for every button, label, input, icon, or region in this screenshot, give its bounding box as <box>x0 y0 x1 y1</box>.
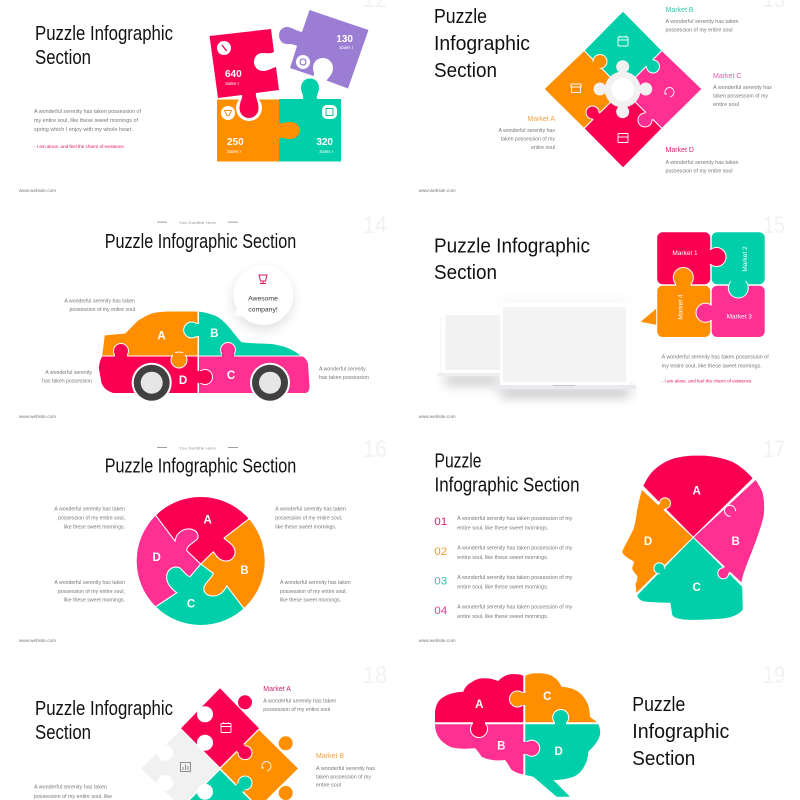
list item 04 <box>434 605 573 620</box>
text: upper right: A wonderful serenity has taken <box>275 507 346 513</box>
market C <box>713 73 772 108</box>
market B <box>316 753 375 789</box>
car piece C <box>198 356 310 394</box>
subtitle: You Subtitle Here <box>179 220 217 225</box>
list item 03 <box>434 575 573 591</box>
icon: headset <box>665 88 674 97</box>
market B: possession of my entire soul <box>666 28 732 34</box>
brain piece C <box>525 673 597 722</box>
market B <box>666 7 739 34</box>
text: upper left: like these sweet mornings. <box>64 525 125 531</box>
head piece A <box>643 455 753 537</box>
panel: slide 19 brain puzzle <box>435 662 785 797</box>
text block: spring which I enjoy with my whole heart. <box>34 127 133 133</box>
text: lower left <box>42 370 92 385</box>
list item 03: entire soul, like these sweet mornings. <box>457 585 548 591</box>
slide number 18: 18 <box>363 662 387 689</box>
text: lower left <box>54 580 125 604</box>
text: upper left: A wonderful serenity has taken <box>64 299 135 305</box>
head label B: B <box>732 536 740 548</box>
title: Section <box>632 748 695 770</box>
text: upper right: like these sweet mornings. <box>275 525 336 531</box>
callout: awesome company <box>233 265 293 330</box>
title: Section <box>35 47 91 69</box>
panel: slide 12 four sales puzzle <box>19 0 387 193</box>
text: upper left: A wonderful serenity has taken <box>54 507 125 513</box>
head piece C <box>637 537 743 620</box>
market D: possession of my entire soul <box>666 168 732 174</box>
head piece B <box>693 479 765 583</box>
list item 04: 04 <box>434 605 447 617</box>
head puzzle <box>622 455 765 620</box>
panel: slide 18 tilted puzzle <box>34 662 387 800</box>
text: lower left: A wonderful serenity has taken <box>54 580 125 586</box>
circle label B: B <box>240 565 249 577</box>
puzzle piece: teal 320 <box>279 78 341 162</box>
bite in teal <box>197 784 213 800</box>
panel: slide 14 car puzzle <box>19 212 387 419</box>
teal tab <box>236 776 252 792</box>
circle piece D <box>136 516 201 607</box>
market B: Market B <box>666 7 694 14</box>
puzzle piece: red 640: Sales I <box>225 81 239 86</box>
text: right <box>319 367 369 381</box>
text block: possession of my entire soul, like <box>34 794 112 800</box>
list item 04: entire soul, like these sweet mornings. <box>457 614 548 620</box>
text block <box>662 354 769 369</box>
tab: orange <box>658 498 670 511</box>
brain label A: A <box>475 699 483 711</box>
text: lower right: possession of my entire soul, <box>280 589 347 595</box>
puzzle piece market 3 <box>711 285 765 338</box>
diamond puzzle <box>544 11 702 168</box>
market B: taken possession of my <box>316 774 371 780</box>
market B: A wonderful serenity has taken <box>666 19 739 25</box>
puzzle piece: red 640 <box>210 29 279 118</box>
piece: grey <box>141 730 220 800</box>
puzzle piece market 1 <box>657 232 711 285</box>
puzzle piece: purple 130: Sales I <box>339 45 353 50</box>
puzzle piece market 2 <box>711 232 765 285</box>
market A: possession of my entire soul <box>263 707 330 713</box>
car label B: B <box>210 328 218 340</box>
text block: A wonderful serenity has taken <box>34 785 107 791</box>
panel: slide 16 circle puzzle <box>19 436 387 643</box>
market D <box>666 147 739 174</box>
market A: taken possession of my <box>501 136 555 142</box>
title: Section <box>434 60 497 82</box>
quote: - I am alone, and feel the charm of existence. <box>662 379 753 385</box>
piece: orange left <box>544 50 623 128</box>
left wheel <box>132 363 172 403</box>
title: Puzzle Infographic <box>35 23 173 45</box>
tab: pink upper <box>724 505 737 518</box>
piece: red <box>181 688 259 767</box>
circle puzzle <box>136 497 265 625</box>
car label C: C <box>227 370 235 382</box>
list item 04: A wonderful serenity has taken possession of my <box>457 605 573 611</box>
slide number 17: 17 <box>763 436 785 463</box>
text block: my entire soul, like these sweet mornings. <box>662 363 762 369</box>
text: upper right: possession of my entire soul, <box>275 516 342 522</box>
tilted puzzle <box>141 688 298 800</box>
puzzle piece: orange 250: 250 <box>227 137 244 148</box>
tabs <box>673 248 748 322</box>
slide number 15: 15 <box>763 212 785 239</box>
text: upper right <box>275 507 346 531</box>
tabs <box>114 322 236 384</box>
puzzle piece: orange 250: Sales I <box>227 149 241 154</box>
text: right: has taken possession <box>319 375 369 381</box>
list item 01: 01 <box>434 516 447 528</box>
subtitle: You Subtitle Here <box>179 445 217 450</box>
head label D: D <box>644 536 652 548</box>
brain puzzle <box>435 673 600 797</box>
bites in grey <box>157 745 173 791</box>
text: upper left: possession of my entire soul, <box>58 516 125 522</box>
list item 03: A wonderful serenity has taken possession of my <box>457 575 573 581</box>
puzzle piece: teal 320: Sales I <box>319 149 333 154</box>
market A: entire soul <box>531 145 555 151</box>
footer url: www.website.com <box>419 414 456 419</box>
circle label A: A <box>204 514 212 526</box>
piece: teal <box>181 770 259 800</box>
icon: calendar <box>618 36 628 46</box>
brain label D: D <box>555 746 563 758</box>
text: lower left: A wonderful serenity <box>45 370 92 376</box>
title: Infographic <box>632 721 729 743</box>
callout tail <box>641 308 657 325</box>
puzzle piece: teal 320: 320 <box>316 137 333 148</box>
list item 01: entire soul, like these sweet mornings. <box>457 525 548 531</box>
market A: Market A <box>527 116 555 123</box>
market C: Market C <box>713 73 741 80</box>
slide number 16: 16 <box>363 436 387 463</box>
panel: slide 13 diamond puzzle <box>419 0 785 193</box>
list item 02 <box>434 546 573 561</box>
tab: orange <box>591 54 607 71</box>
title: Puzzle <box>434 450 482 472</box>
head label C: C <box>693 582 701 594</box>
panel: slide 15 laptops and puzzle <box>419 212 785 419</box>
circle label C: C <box>187 599 195 611</box>
square puzzle <box>641 232 765 338</box>
market C: A wonderful serenity has <box>713 85 772 91</box>
footer url: www.website.com <box>19 188 56 193</box>
tab: pink lower <box>718 566 730 579</box>
circle piece C <box>156 564 244 625</box>
text: lower left: like these sweet mornings. <box>64 598 125 604</box>
text block: A wonderful serenity has taken possession of <box>34 109 142 115</box>
text block <box>34 785 112 800</box>
title: Puzzle Infographic <box>434 236 590 258</box>
title: Section <box>434 262 497 284</box>
piece: orange <box>221 730 298 800</box>
car piece D <box>98 356 198 394</box>
puzzle piece: orange 250 <box>217 95 300 162</box>
brain piece B <box>435 724 523 774</box>
head label A: A <box>693 486 701 498</box>
text block: my entire soul, like these sweet mornings of <box>34 118 139 124</box>
label market 2: Market 2 <box>742 246 749 272</box>
puzzle piece: purple 130: 130 <box>336 34 353 45</box>
footer url: www.website.com <box>419 638 456 643</box>
text: lower right: like these sweet mornings. <box>280 598 341 604</box>
laptop mockups <box>438 300 636 396</box>
list item 02: entire soul, like these sweet mornings. <box>457 555 548 561</box>
market C: entire soul <box>713 102 739 108</box>
label market 1: Market 1 <box>672 250 698 257</box>
tab: pink <box>638 111 654 127</box>
market A <box>498 116 555 151</box>
title: Puzzle Infographic Section <box>105 456 296 478</box>
label market 4: Market 4 <box>678 294 684 320</box>
footer url: www.website.com <box>19 638 56 643</box>
text: lower right: A wonderful serenity has taken <box>280 580 351 586</box>
market C: taken possession of my <box>713 94 768 100</box>
circle piece A <box>156 497 249 565</box>
text: upper left <box>64 299 135 313</box>
market D: Market D <box>666 147 694 154</box>
title: Infographic <box>434 33 530 55</box>
car piece A <box>102 311 198 356</box>
right wheel <box>250 363 290 403</box>
subtitle <box>157 220 238 225</box>
car puzzle <box>98 311 310 403</box>
list item 01: A wonderful serenity has taken possession of my <box>457 516 573 522</box>
piece: pink right <box>623 50 702 128</box>
puzzle piece market 4 <box>657 285 711 338</box>
market A: Market A <box>263 686 291 693</box>
text: lower right <box>280 580 351 604</box>
text: upper left: possession of my entire soul <box>70 307 135 313</box>
head piece D <box>622 489 693 594</box>
market B: Market B <box>316 753 344 760</box>
icon: headset <box>262 762 271 771</box>
callout: awesome company: company! <box>248 306 278 313</box>
footer url: www.website.com <box>419 188 456 193</box>
brain piece A <box>435 674 523 722</box>
tab: teal <box>654 563 666 575</box>
list item 02: 02 <box>434 546 447 558</box>
piece: teal top <box>584 11 662 90</box>
footer url: www.website.com <box>19 414 56 419</box>
text: lower left: has taken possession <box>42 379 92 385</box>
market B: A wonderful serenity has <box>316 766 375 772</box>
list item 03: 03 <box>434 576 447 588</box>
quote: - I am alone, and feel the charm of existence. <box>34 144 125 150</box>
panel: slide 17 head puzzle <box>419 436 785 643</box>
text block: A wonderful serenity has taken possession of <box>662 354 769 360</box>
list item 01 <box>434 516 573 531</box>
slide number 14: 14 <box>363 212 387 239</box>
market B: entire soul <box>316 783 341 789</box>
car piece B <box>198 311 302 356</box>
title: Infographic Section <box>434 475 580 497</box>
puzzle piece: red 640: 640 <box>225 69 242 80</box>
text: right: A wonderful serenity <box>319 367 366 373</box>
puzzle piece: purple 130 <box>279 10 368 88</box>
brain piece D <box>525 724 600 797</box>
icon: archive box <box>571 84 581 92</box>
center ring <box>594 60 652 118</box>
title: Section <box>35 722 91 744</box>
tab: teal <box>644 58 660 73</box>
market A <box>263 686 336 713</box>
icon: calendar <box>221 722 231 732</box>
icon: bar chart <box>180 762 190 772</box>
brain label B: B <box>497 740 505 752</box>
subtitle <box>157 445 238 450</box>
list item 02: A wonderful serenity has taken possession of my <box>457 546 573 552</box>
car label A: A <box>157 330 166 342</box>
text: upper left <box>54 507 125 531</box>
market A: A wonderful serenity has taken <box>263 699 336 705</box>
market A: A wonderful serenity has <box>498 128 555 134</box>
circle label D: D <box>153 552 161 564</box>
title: Puzzle <box>434 6 487 28</box>
title: Puzzle Infographic Section <box>105 231 296 253</box>
tab: red <box>586 106 601 121</box>
icon: calendar red <box>618 134 628 142</box>
circle piece B <box>202 519 265 608</box>
title: Puzzle <box>632 694 685 716</box>
car label D: D <box>179 375 187 387</box>
text: lower left: possession of my entire soul, <box>58 589 125 595</box>
piece: red bottom <box>584 90 662 168</box>
brain label C: C <box>543 691 551 703</box>
title: Puzzle Infographic <box>35 698 173 720</box>
label market 3: Market 3 <box>727 313 752 320</box>
slide number 19: 19 <box>763 662 785 689</box>
callout: awesome company: Awesome <box>248 296 278 303</box>
market D: A wonderful serenity has taken <box>666 160 739 166</box>
brain tabs <box>470 691 569 756</box>
